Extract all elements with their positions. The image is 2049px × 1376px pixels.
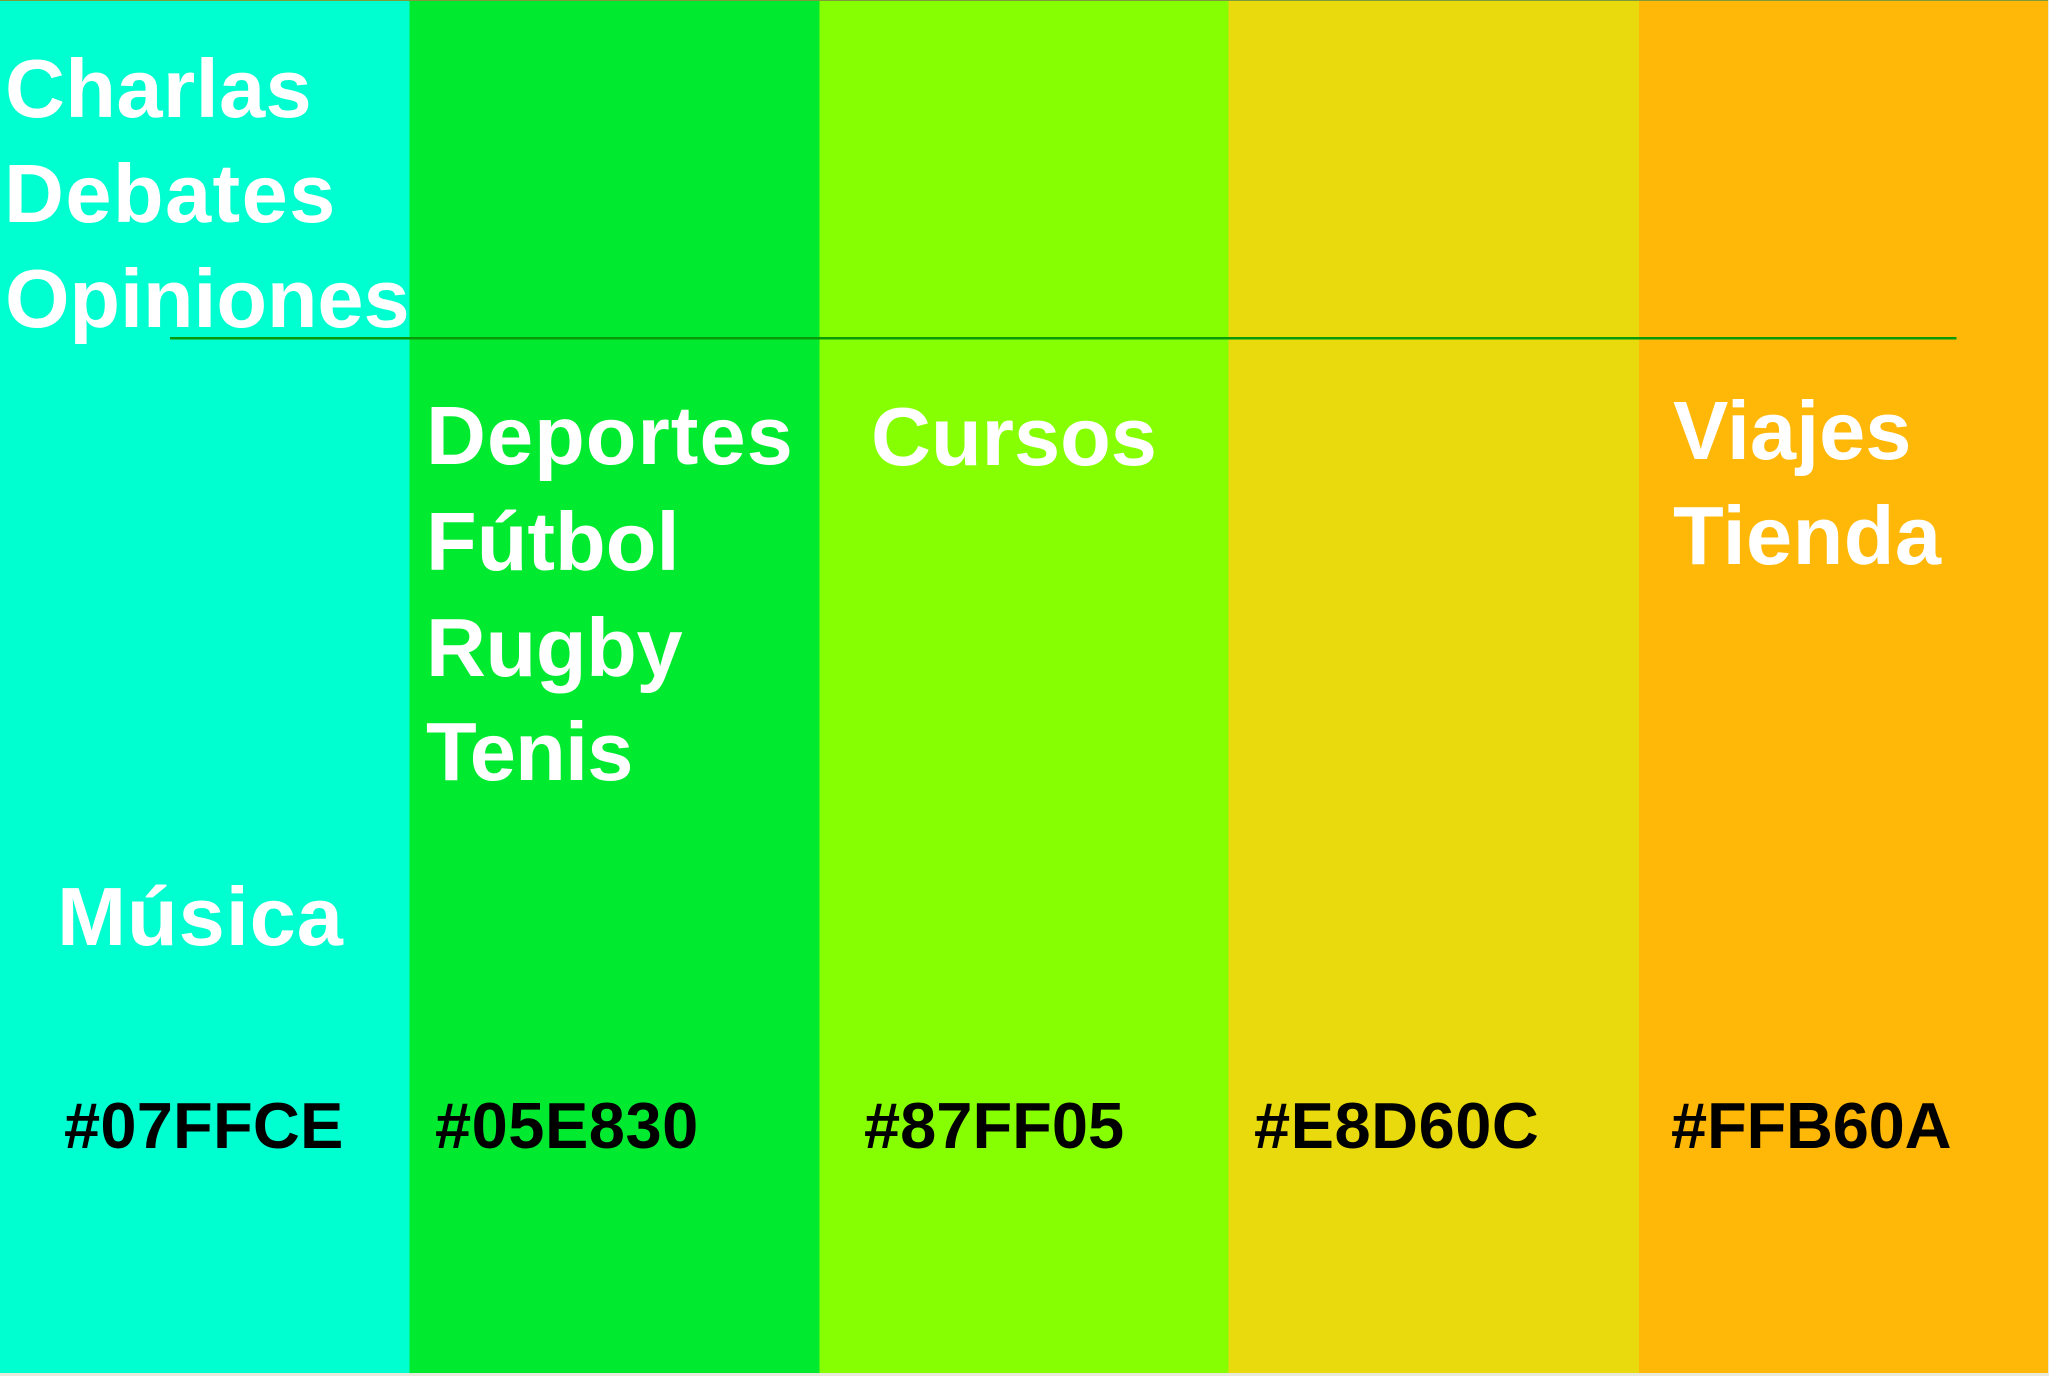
text block: sports list: Tenis — [426, 705, 633, 798]
panel: lime column — [820, 1, 1228, 1373]
text block: Charlas, Debates, Opiniones: Debates — [4, 147, 337, 240]
text block: sports list: Fútbol — [426, 495, 680, 588]
text block: Viajes, Tienda: Tienda — [1673, 489, 1942, 582]
colour code: green: #05E830 — [435, 1089, 699, 1162]
text block: Charlas, Debates, Opiniones: Charlas — [5, 42, 312, 135]
text block: sports list: Rugby — [426, 601, 682, 694]
colour code: orange: #FFB60A — [1671, 1089, 1951, 1162]
panel: green column — [410, 1, 820, 1373]
text block: sports list — [426, 389, 794, 798]
text block: Charlas, Debates, Opiniones: Opiniones — [5, 252, 409, 345]
text block: sports list: Deportes — [426, 389, 794, 482]
text block: Música: Música — [57, 870, 344, 963]
panel: yellow column — [1228, 1, 1639, 1373]
colour code: turquoise: #07FFCE — [64, 1089, 344, 1162]
colour code: yellow: #E8D60C — [1254, 1089, 1539, 1162]
text block: Charlas, Debates, Opiniones — [4, 42, 409, 345]
panel: turquoise column — [0, 1, 410, 1373]
panel: orange column — [1639, 1, 2048, 1373]
colour code: lime: #87FF05 — [864, 1089, 1124, 1162]
divider line — [170, 337, 1956, 340]
text block: Viajes, Tienda: Viajes — [1673, 384, 1911, 477]
top edge — [0, 0, 2048, 1]
text block: Cursos: Cursos — [871, 390, 1157, 483]
text block: Viajes, Tienda — [1673, 384, 1942, 582]
